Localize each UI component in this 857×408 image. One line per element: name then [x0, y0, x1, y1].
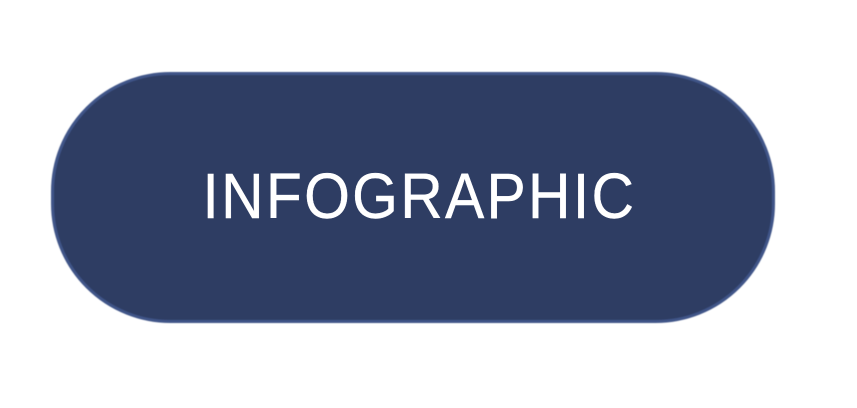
- button label: INFOGRAPHIC: [202, 161, 634, 233]
- pill button shape: [52, 74, 774, 322]
